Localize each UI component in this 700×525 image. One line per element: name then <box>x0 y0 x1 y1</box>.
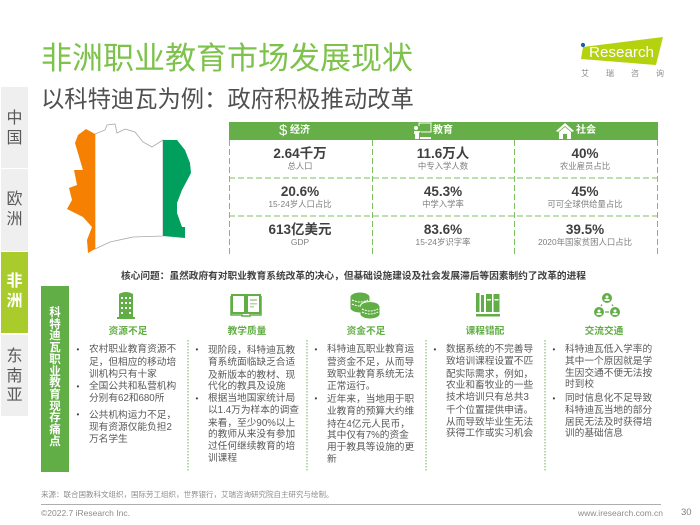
tab: 欧洲 <box>1 169 28 251</box>
website: www.iresearch.com.cn <box>578 508 663 518</box>
tab: 非洲 active: 洲 <box>6 292 22 310</box>
cell: 2020年国家贫困人口占比: 2020年国家贫困人口占比 <box>538 237 632 247</box>
cell: 中专入学人数: 11.6万人 <box>417 146 469 161</box>
header: 经济 <box>279 122 310 139</box>
bullet text: 数据系统的不完善导 <box>446 344 533 355</box>
bullet text: 致职业教育系统无法 <box>327 368 414 380</box>
bullet text: 分别有62和680所 <box>89 393 164 404</box>
left label box: 育 <box>49 389 61 401</box>
subtitle: 以科特迪瓦为例：政府积极推动改革 <box>41 80 414 114</box>
bullet text: 以1.4万为样本的调查 <box>208 405 299 416</box>
icon: coins <box>350 292 380 318</box>
cell: 15-24岁识字率: 15-24岁识字率 <box>416 237 470 247</box>
bullet text <box>89 409 176 445</box>
tab: 东南亚: 亚 <box>6 387 22 404</box>
bullet text <box>89 381 176 404</box>
logo: iResearch <box>580 37 681 78</box>
header: 教育: 教育 <box>433 125 453 136</box>
panel: 交流交通 <box>552 293 652 439</box>
table: country indicators <box>229 122 658 254</box>
tab: 欧洲: 洲 <box>6 210 22 228</box>
page number: 30 <box>681 507 692 518</box>
cell: 总人口: 2.64千万 <box>273 146 327 161</box>
heading: 交流交通 <box>585 326 623 337</box>
bullet text: 科特迪瓦当地的部分 <box>565 405 652 416</box>
header: 教育 <box>414 122 453 139</box>
title: 非洲职业教育市场发展现状 <box>41 41 413 76</box>
cell: 可可全球供给量占比: 可可全球供给量占比 <box>547 199 623 209</box>
source note: 来源：联合国教科文组织，国际劳工组织，世界银行，艾瑞咨询研究院自主研究与绘制。 <box>41 489 334 500</box>
table grid lines <box>229 140 658 254</box>
copyright: ©2022.7 iResearch Inc. <box>41 508 130 518</box>
left label box: 瓦 <box>49 342 61 354</box>
bullet text <box>327 344 414 393</box>
left label box: 职 <box>49 354 61 366</box>
cell: 中专入学人数 <box>417 146 469 171</box>
cell: 农业雇员占比: 农业雇员占比 <box>560 161 610 171</box>
left label box: 业 <box>49 366 61 378</box>
left label box: 点 <box>49 436 61 448</box>
bullet text: 正常运行。 <box>327 378 375 392</box>
bullet text: 同时信息化不足导致 <box>565 393 652 404</box>
cell: GDP: GDP <box>291 237 309 247</box>
bullet text: 农业和畜牧业的一些 <box>446 380 533 391</box>
bullet text: 配实际需求，例如， <box>446 366 533 380</box>
header: 经济: 经济 <box>290 125 310 136</box>
heading: 课程错配 <box>466 326 504 337</box>
bullet text: 近年来，当地用于职 <box>327 391 414 405</box>
cell: 农业雇员占比: 40% <box>571 146 599 161</box>
tab: 非洲 active: 非 <box>6 273 22 290</box>
header bar <box>229 122 658 140</box>
left label box <box>41 286 69 472</box>
left label box: 科 <box>49 307 61 319</box>
cell: 中专入学人数: 中专入学人数 <box>418 161 468 171</box>
panel: 教学质量 <box>196 294 299 464</box>
cell: 2020年国家贫困人口占比: 39.5% <box>566 222 604 237</box>
logo: iResearch: Research <box>589 44 654 61</box>
icon: book <box>230 294 262 317</box>
bullet text: 现阶段，科特迪瓦教 <box>208 342 295 356</box>
panel: 资源不足 <box>76 292 176 444</box>
cell: 中学入学率 <box>422 184 464 209</box>
tab: 东南亚 <box>1 335 28 416</box>
header: 社会 <box>556 123 596 139</box>
bullet text <box>565 393 652 440</box>
tab: 欧洲: 欧 <box>6 191 22 208</box>
cell: 15-24岁识字率: 83.6% <box>424 222 462 237</box>
logo: iResearch: 艾瑞咨询 <box>581 69 681 78</box>
panel: 资金不足 <box>314 292 414 465</box>
bullet text: 业教育的预算大约维 <box>327 406 414 417</box>
tab: 非洲 active <box>1 252 28 333</box>
icon: building <box>117 292 135 319</box>
cell: 农业雇员占比 <box>560 146 610 171</box>
cell: 总人口: 总人口 <box>287 161 313 171</box>
bullet text: 致培训课程设置不匹 <box>446 356 533 367</box>
bullet text: 技术培训只有总共3 <box>446 392 529 403</box>
bullet text <box>208 344 295 393</box>
bullet text: 训课程 <box>208 453 237 464</box>
bullet text: 现有资源仅能负担2 <box>89 422 172 433</box>
bullet text <box>89 344 176 380</box>
left label box: 存 <box>49 412 61 424</box>
bullet text: 其中仅有7%的资金 <box>327 430 409 441</box>
left label box: 现 <box>49 401 61 413</box>
bullet text: 训的基础信息 <box>565 428 623 439</box>
bullet text: 新 <box>327 454 337 465</box>
column dividers <box>188 340 546 470</box>
cell: GDP: 613亿美元 <box>268 222 332 237</box>
core question: 核心问题：虽然政府有对职业教育系统改革的决心，但基础设施建设及社会发展滞后等因素制约了改革的进程 <box>121 268 586 282</box>
left label box: 迪 <box>49 330 61 342</box>
bullet text: 根据当地国家统计局 <box>208 393 295 404</box>
bullet text: 代化的教具及设施 <box>208 381 286 392</box>
cell: 可可全球供给量占比: 45% <box>571 184 599 199</box>
heading: 资金不足 <box>347 326 385 337</box>
bullet text: 的教师从来没有参加 <box>208 429 295 440</box>
bullet text: 获得工作或实习机会 <box>446 428 533 439</box>
left label box: 特 <box>49 319 61 331</box>
heading: 教学质量 <box>228 326 266 337</box>
bullet text: 育系统面临缺乏合适 <box>208 357 295 368</box>
bullet text <box>327 393 414 466</box>
tab: 东南亚: 南 <box>6 368 22 384</box>
bullet text <box>446 344 533 440</box>
cell: 15-24岁人口占比: 20.6% <box>281 184 319 199</box>
tab: 中国: 中 <box>6 110 22 127</box>
panel: 课程错配 <box>434 293 533 439</box>
bullet text: 用于教具等设施的更 <box>327 442 414 453</box>
bullet text: 训机构只有十家 <box>89 368 157 380</box>
icon: people network <box>594 293 620 317</box>
bullet text: 其中一个原因就是学 <box>565 356 652 367</box>
header: 经济: $ <box>279 122 287 139</box>
bullet text: 足，但相应的移动培 <box>89 354 176 368</box>
left label box: 痛 <box>49 424 61 436</box>
cell: 15-24岁人口占比 <box>268 184 332 209</box>
cell: 可可全球供给量占比 <box>547 184 623 209</box>
footer rule <box>41 504 661 505</box>
cell: 总人口 <box>273 146 327 171</box>
bullet text: 营资金不足，从而导 <box>327 354 414 368</box>
bullet text: 全国公共和私营机构 <box>89 381 176 392</box>
bullet text: 万名学生 <box>89 434 128 444</box>
bullet text: 农村职业教育资源不 <box>89 344 176 355</box>
cell: 15-24岁人口占比: 15-24岁人口占比 <box>268 199 332 209</box>
bullet text: 来看，至少90%以上 <box>208 414 295 428</box>
cell: 2020年国家贫困人口占比 <box>538 222 632 247</box>
tab: 东南亚: 东 <box>6 348 22 365</box>
icon: books <box>476 293 500 316</box>
bullet text: 及新版本的教材、现 <box>208 366 295 380</box>
bullet text: 科特迪瓦职业教育运 <box>327 344 414 355</box>
bullet text: 时到校 <box>565 379 594 390</box>
bullet text <box>208 393 299 464</box>
tab: 中国 <box>1 87 28 168</box>
bullet text: 持在4亿元人民币， <box>327 416 410 430</box>
left label box: 教 <box>49 377 61 389</box>
cell: 15-24岁识字率 <box>416 222 470 247</box>
bullet text: 生因交通不便无法按 <box>565 368 652 378</box>
bullet text: 科特迪瓦低入学率的 <box>565 344 652 355</box>
header: 社会: 社会 <box>576 125 596 136</box>
bullet text: 过任何继续教育的培 <box>208 441 295 452</box>
heading: 资源不足 <box>109 326 147 337</box>
tab: 中国: 国 <box>6 130 22 146</box>
cell: 中学入学率: 中学入学率 <box>422 199 464 209</box>
cell: GDP <box>268 222 332 247</box>
bullet text: 千个位置提供申请。 <box>446 402 533 416</box>
bullet text: 居民无法及时获得培 <box>565 416 652 428</box>
bullet text: 公共机构运力不足， <box>89 407 176 421</box>
cell: 中学入学率: 45.3% <box>424 184 462 199</box>
bullet text: 从而导致毕业生无法 <box>446 416 533 428</box>
bullet text <box>565 344 652 391</box>
map: Côte d'Ivoire flag map <box>67 124 191 253</box>
